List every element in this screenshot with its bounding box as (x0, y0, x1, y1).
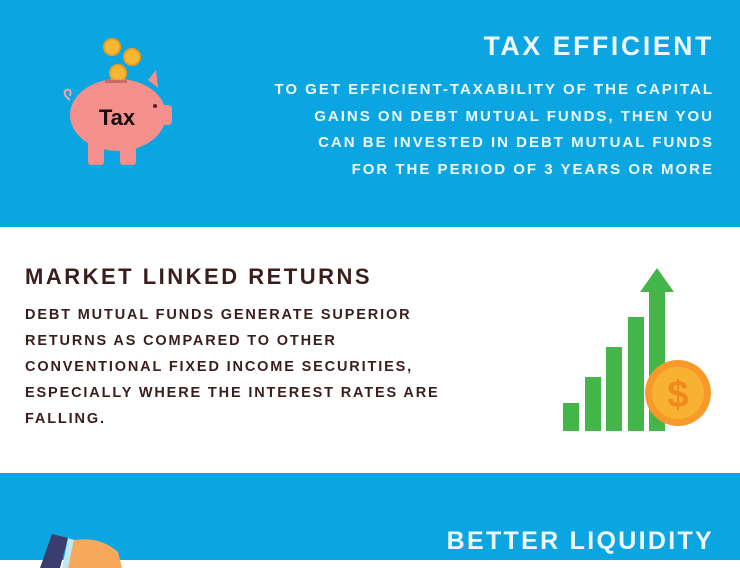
text: tax efficient body: CAN BE INVESTED IN DEBT MUTUAL FUNDS (318, 134, 714, 151)
heading: market linked returns: MARKET LINKED RETURNS (25, 264, 372, 289)
icon: growth chart with coin: $ (667, 374, 689, 416)
text: market linked body: FALLING. (25, 411, 106, 427)
icon: growth chart with coin (563, 268, 711, 431)
panel: market linked returns (0, 227, 740, 473)
text: market linked body: ESPECIALLY WHERE THE INTEREST RATES ARE (25, 385, 440, 401)
icon: piggy bank (64, 38, 172, 165)
text: market linked body: RETURNS AS COMPARED TO OTHER (25, 333, 337, 349)
text: tax efficient body: TO GET EFFICIENT-TAXABILITY OF THE CAPITAL (274, 81, 714, 98)
text: market linked body: DEBT MUTUAL FUNDS GENERATE SUPERIOR (25, 307, 411, 323)
panel: better liquidity (0, 473, 740, 560)
text: market linked body: CONVENTIONAL FIXED INCOME SECURITIES, (25, 359, 413, 375)
panel: tax efficient (0, 0, 740, 227)
label: Tax: Tax (99, 105, 136, 130)
icon: hand (40, 534, 122, 568)
heading: tax efficient: TAX EFFICIENT (484, 31, 714, 61)
text: tax efficient body (274, 81, 714, 178)
text: tax efficient body: FOR THE PERIOD OF 3 YEARS OR MORE (352, 160, 714, 178)
text: market linked body (25, 307, 440, 427)
text: tax efficient body: GAINS ON DEBT MUTUAL FUNDS, THEN YOU (314, 108, 714, 124)
heading: better liquidity: BETTER LIQUIDITY (447, 527, 714, 555)
